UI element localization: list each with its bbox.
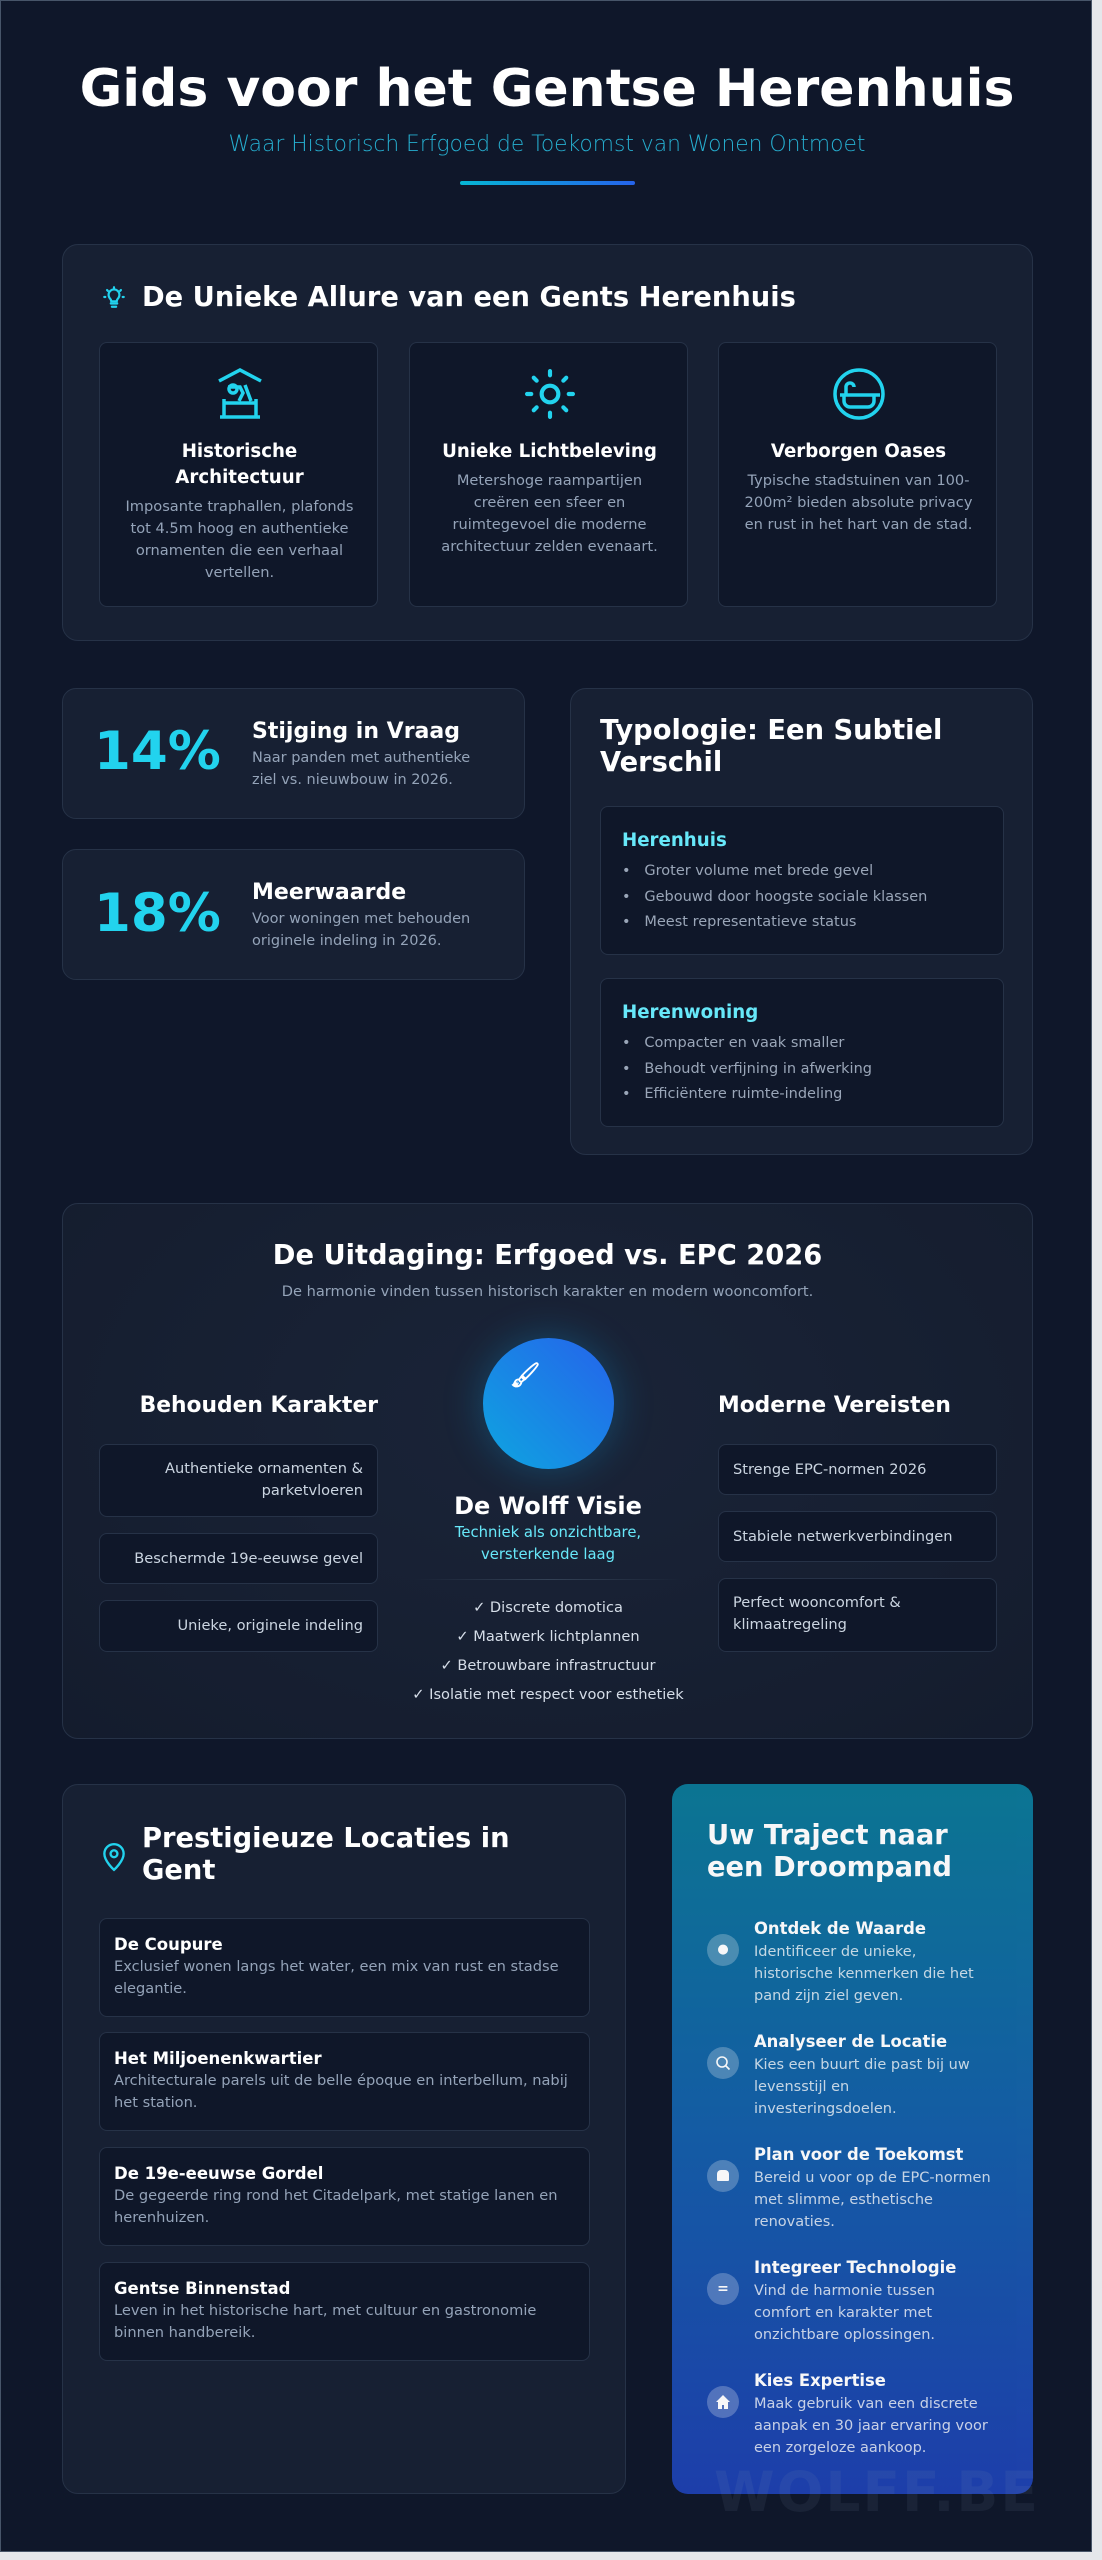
watermark: WOLFF.BE (714, 2460, 1040, 2524)
stat card: 18%: Voor woningen met behouden originele indeling in 2026. (252, 911, 470, 949)
step 4: Vind de harmonie tussen comfort en karakter met onzichtbare oplossingen. (754, 2283, 935, 2343)
step 5 (707, 2371, 988, 2456)
right column: moderne vereisten: Stabiele netwerkverbindingen (733, 1528, 952, 1545)
icon: lightbulb (103, 286, 125, 308)
stat card: 14%: 14% (94, 721, 221, 782)
card: miljoenenkwartier: Architecturale parels uit de belle époque en interbellum, nabij het station. (114, 2072, 568, 2111)
card: lichtbeleving: Metershoge raampartijen creëren een sfeer en ruimtegevoel die moderne architectuur zelden evenaart. (441, 472, 658, 555)
step 3: Bereid u voor op de EPC-normen met slimme, esthetische renovaties. (754, 2170, 991, 2230)
panel: de uitdaging (62, 1203, 1033, 1739)
card: coupure (99, 1918, 590, 2017)
left column: behouden karakter (99, 1393, 378, 1652)
card: lichtbeleving: Unieke Lichtbeleving (442, 441, 657, 462)
card: herenwoning: • Behoudt verfijning in afwerking (622, 1060, 872, 1076)
panel: locaties: Prestigieuze Locaties in Gent (142, 1823, 510, 1886)
card: binnenstad: Gentse Binnenstad (114, 2279, 290, 2298)
panel: de uitdaging: De Uitdaging: Erfgoed vs. EPC 2026 (273, 1240, 822, 1271)
stat card: 14%: Stijging in Vraag (252, 719, 460, 744)
right column: moderne vereisten: Moderne Vereisten (718, 1393, 951, 1418)
card: herenhuis: • Gebouwd door hoogste sociale klassen (622, 888, 927, 904)
icon: sun (525, 369, 575, 419)
icon: map pin (103, 1843, 125, 1872)
step 2: Analyseer de Locatie (754, 2032, 947, 2051)
card: coupure: De Coupure (114, 1935, 223, 1954)
panel: unieke allure (62, 244, 1033, 641)
card: herenwoning: Herenwoning (622, 1002, 758, 1023)
card: miljoenenkwartier (99, 2032, 590, 2131)
step 1: Identificeer de unieke, historische kenmerken die het pand zijn ziel geven. (754, 1944, 974, 2004)
stat card: 18%: Meerwaarde (252, 880, 406, 905)
stat card: 18% (62, 849, 525, 980)
card: gordel (99, 2147, 590, 2246)
center: wolff visie: ✓ Isolatie met respect voor esthetiek (412, 1686, 684, 1703)
panel: traject: Uw Traject naar een Droompand (707, 1820, 952, 1883)
center: wolff visie (412, 1322, 684, 1703)
step 2: Kies een buurt die past bij uw levensstijl en investeringsdoelen. (754, 2057, 970, 2117)
left column: behouden karakter: Beschermde 19e-eeuwse gevel (134, 1550, 363, 1567)
card: gordel: De 19e-eeuwse Gordel (114, 2164, 323, 2183)
card: binnenstad: Leven in het historische hart, met cultuur en gastronomie binnen handbereik. (114, 2302, 536, 2341)
panel: typologie: Typologie: Een Subtiel Verschil (600, 715, 942, 778)
center: wolff visie: De Wolff Visie (454, 1492, 642, 1520)
left column: behouden karakter: Unieke, originele indeling (177, 1617, 363, 1634)
card: historische architectuur (99, 342, 378, 607)
center: wolff visie: ✓ Discrete domotica (473, 1599, 623, 1616)
panel: typologie (570, 688, 1033, 1155)
right column: moderne vereisten: Strenge EPC-normen 2026 (733, 1461, 926, 1478)
icon: circle: 🖌 (510, 1361, 540, 1389)
center: wolff visie: ✓ Betrouwbare infrastructuur (440, 1657, 656, 1674)
step 4 (707, 2258, 956, 2343)
accent bar (460, 181, 635, 185)
stat card: 14% (62, 688, 525, 819)
step 1 (707, 1919, 974, 2004)
left column: behouden karakter: Authentieke ornamenten & parketvloeren (165, 1460, 363, 1499)
step 1: Ontdek de Waarde (754, 1919, 926, 1938)
panel: locaties (62, 1784, 626, 2494)
stat card: 18%: 18% (94, 883, 221, 944)
card: herenhuis: • Meest representatieve status (622, 914, 856, 930)
step 1: ● (717, 1942, 729, 1957)
step 2 (707, 2032, 970, 2117)
icon: bath (833, 368, 885, 420)
panel: de uitdaging: De harmonie vinden tussen historisch karakter en modern wooncomfort. (282, 1283, 813, 1300)
right column: moderne vereisten (718, 1393, 997, 1652)
center: wolff visie: Techniek als onzichtbare, (455, 1524, 641, 1541)
stat card: 14%: Naar panden met authentieke ziel vs. nieuwbouw in 2026. (252, 750, 470, 788)
panel: traject (672, 1784, 1033, 2494)
card: herenwoning (600, 978, 1004, 1127)
icon: building (218, 368, 262, 419)
left column: behouden karakter: Behouden Karakter (140, 1393, 378, 1418)
card: verborgen oases (718, 342, 997, 607)
subtitle: Waar Historisch Erfgoed de Toekomst van Wonen Ontmoet (229, 132, 865, 157)
card: lichtbeleving (409, 342, 688, 607)
card: herenhuis: • Groter volume met brede gevel (622, 863, 873, 879)
card: binnenstad (99, 2262, 590, 2361)
heading: De Unieke Allure van een Gents Herenhuis (142, 282, 796, 313)
step 4: Integreer Technologie (754, 2258, 956, 2277)
card: herenhuis: Herenhuis (622, 830, 727, 851)
step 5: Kies Expertise (754, 2371, 886, 2390)
step 3 (707, 2145, 991, 2230)
card: coupure: Exclusief wonen langs het water, een mix van rust en stadse elegantie. (114, 1958, 559, 1997)
step 5: Maak gebruik van een discrete aanpak en 30 jaar ervaring voor een zorgeloze aankoop. (754, 2396, 988, 2456)
card: herenhuis (600, 806, 1004, 955)
card: historische architectuur: Imposante traphallen, plafonds tot 4.5m hoog en authentieke ornamenten die een verhaal vertellen. (125, 498, 354, 581)
right column: moderne vereisten: Perfect wooncomfort & klimaatregeling (733, 1594, 901, 1633)
card: herenwoning: • Efficiëntere ruimte-indeling (622, 1086, 842, 1102)
icon: circle (483, 1338, 614, 1469)
center: wolff visie: ✓ Maatwerk lichtplannen (456, 1628, 640, 1645)
card: verborgen oases: Typische stadstuinen van 100-200m² bieden absolute privacy en rust in het hart van de stad. (745, 472, 972, 533)
title: Gids voor het Gentse Herenhuis (80, 59, 1014, 119)
card: gordel: De gegeerde ring rond het Citadelpark, met statige lanen en herenhuizen. (114, 2187, 557, 2226)
card: herenwoning: • Compacter en vaak smaller (622, 1035, 844, 1051)
center: wolff visie: versterkende laag (481, 1546, 615, 1563)
step 3: Plan voor de Toekomst (754, 2145, 963, 2164)
card: verborgen oases: Verborgen Oases (771, 441, 946, 462)
card: historische architectuur: Historische Architectuur (175, 441, 304, 488)
step 4: = (717, 2281, 729, 2297)
card: miljoenenkwartier: Het Miljoenenkwartier (114, 2049, 322, 2068)
